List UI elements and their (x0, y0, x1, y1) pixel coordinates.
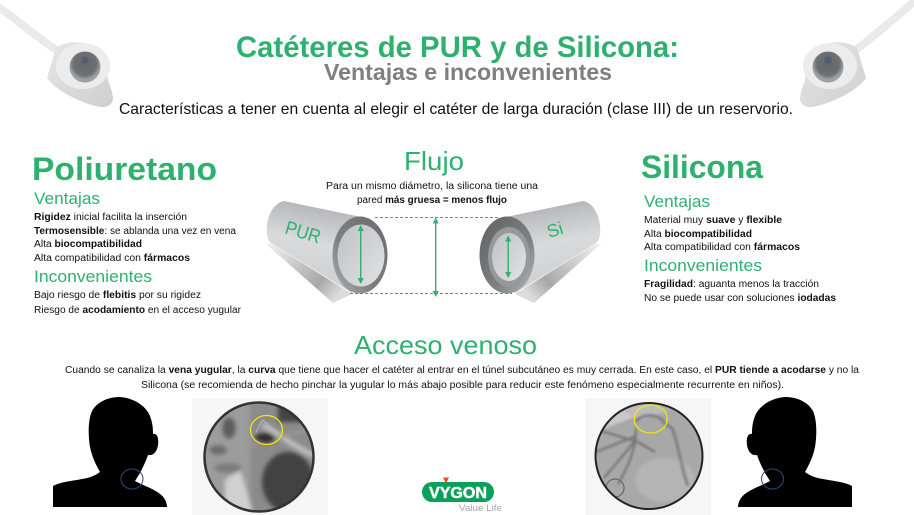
text: ventajas silicona: Alta biocompatibilidad (644, 229, 752, 240)
text: ventajas PUR: Alta compatibilidad con fármacos (34, 253, 190, 264)
arrow: outer diameter (350, 218, 512, 297)
icon: port left (0, 7, 113, 107)
diagram: silicone tube (480, 201, 602, 303)
heading: silicona: Silicona (641, 149, 763, 185)
text: flujo (326, 181, 538, 206)
text: inconvenientes silicona: No se puede usar con soluciones iodadas (644, 293, 836, 304)
text: inconvenientes PUR (34, 290, 242, 316)
label: Si: Si (544, 218, 565, 242)
title: Catéteres de PUR y de Silicona: (236, 31, 679, 64)
icon: port right (800, 0, 914, 107)
text: flujo: pared más gruesa = menos flujo (357, 195, 507, 206)
label: PUR: PUR (283, 218, 323, 248)
logo: Vygon: VYGON (429, 485, 487, 502)
heading: ventajas PUR: Ventajas (34, 189, 100, 208)
marker: jugular right (762, 469, 784, 489)
image: x-ray left (192, 398, 328, 515)
text: ventajas PUR: Rigidez inicial facilita la inserción (34, 212, 187, 223)
text: acceso venoso (65, 365, 859, 391)
heading: inconvenientes PUR: Inconvenientes (34, 267, 152, 286)
text: inconvenientes silicona (644, 279, 836, 304)
heading: flujo: Flujo (404, 146, 464, 176)
text: acceso venoso: Cuando se canaliza la vena yugular, la curva que tiene que hacer el catéter al entrar en el túnel subcutáneo es muy cerrada. En este caso, el PUR tiende a acodarse y no la (65, 365, 859, 376)
logo: Vygon: Value Life (459, 503, 502, 514)
text: ventajas PUR: Termosensible: se ablanda una vez en vena (34, 226, 236, 237)
image: x-ray right (586, 398, 711, 515)
text: inconvenientes PUR: Riesgo de acodamiento en el acceso yugular (34, 305, 242, 316)
marker: jugular left (121, 469, 143, 489)
heading: acceso venoso: Acceso venoso (354, 330, 537, 360)
marker: yellow circle right (634, 405, 667, 433)
text: ventajas silicona: Alta compatibilidad con fármacos (644, 242, 800, 253)
text: ventajas PUR: Alta biocompatibilidad (34, 239, 142, 250)
text: ventajas silicona (644, 215, 800, 253)
marker: yellow circle left (250, 416, 282, 444)
text: ventajas PUR (34, 212, 236, 264)
text: inconvenientes silicona: Fragilidad: aguanta menos la tracción (644, 279, 819, 290)
icon: head silhouette right (738, 397, 852, 507)
text: acceso venoso: Silicona (se recomienda de hecho pinchar la yugular lo más abajo posible para reducir este fenómeno especialmente recurrente en niños). (141, 380, 784, 391)
panel: poliuretano (32, 151, 242, 316)
heading: poliuretano: Poliuretano (32, 151, 217, 187)
icon: head silhouette left (53, 397, 167, 507)
text: ventajas silicona: Material muy suave y flexible (644, 215, 782, 226)
logo: Vygon (422, 478, 502, 514)
intro text: Características a tener en cuenta al elegir el catéter de larga duración (clase III) de un reservorio. (119, 101, 793, 118)
arrow: Si inner diameter (505, 236, 511, 278)
arrow: PUR inner diameter (358, 225, 364, 284)
heading: ventajas silicona: Ventajas (644, 192, 710, 211)
text: inconvenientes PUR: Bajo riesgo de flebitis por su rigidez (34, 290, 201, 301)
panel: flujo (265, 146, 602, 303)
subtitle: Ventajas e inconvenientes (324, 59, 612, 85)
diagram: PUR tube (265, 201, 388, 303)
heading: inconvenientes silicona: Inconvenientes (644, 256, 762, 275)
panel: silicona (641, 149, 836, 304)
text: flujo: Para un mismo diámetro, la silicona tiene una (326, 181, 538, 192)
